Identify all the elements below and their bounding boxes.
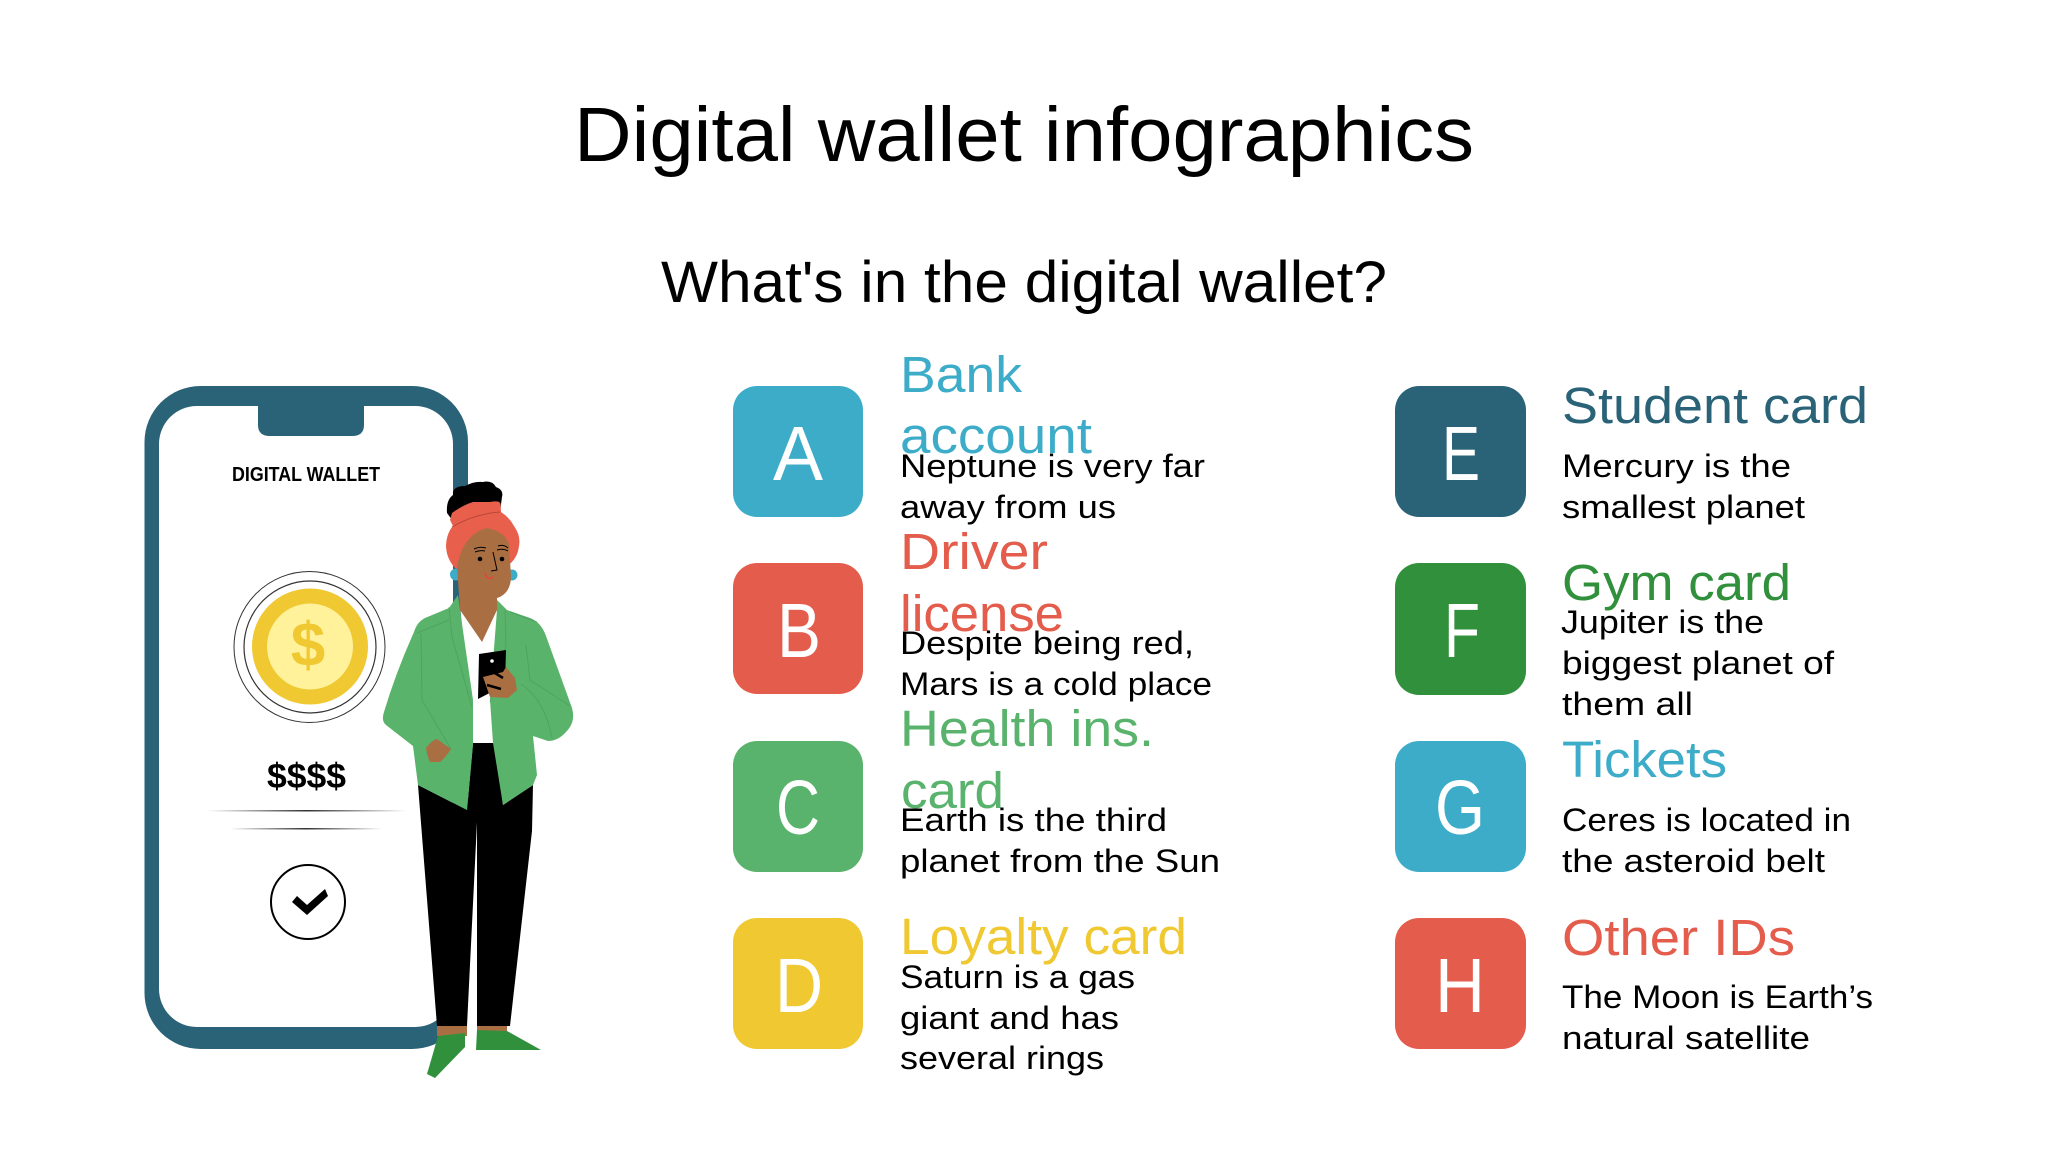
- body E: smallest planet: [1562, 489, 1805, 525]
- shoes: [427, 1030, 541, 1078]
- heading C: [900, 700, 1154, 819]
- item A: bank account: [733, 346, 1205, 525]
- badge E: [1395, 386, 1526, 517]
- item H: other IDs: [1395, 909, 1873, 1056]
- heading H: Other IDs: [1562, 909, 1795, 966]
- badge B: [733, 563, 863, 694]
- badge D: [733, 918, 863, 1049]
- item E: student card: [1395, 377, 1868, 525]
- body F: them all: [1562, 686, 1693, 722]
- heading E: Student card: [1562, 377, 1868, 434]
- badge H: [1395, 918, 1526, 1049]
- heading C: card: [901, 762, 1004, 819]
- badge D: D: [775, 943, 823, 1029]
- body B: Mars is a cold place: [900, 666, 1212, 702]
- icon: gold coin: [234, 572, 385, 722]
- amount: $$$$: [267, 757, 346, 796]
- shirt: [460, 605, 497, 743]
- heading F: Gym card: [1562, 554, 1791, 611]
- earrings: [450, 568, 518, 580]
- body D: [900, 959, 1135, 1076]
- icon: check mark: [271, 865, 345, 939]
- badge F: [1395, 563, 1526, 695]
- face details: [474, 545, 508, 578]
- body D: several rings: [900, 1040, 1104, 1076]
- heading A: Bank: [900, 346, 1023, 403]
- body B: Despite being red,: [900, 625, 1194, 661]
- item C: health insurance card: [733, 700, 1220, 879]
- badge A: A: [773, 411, 824, 497]
- turban: [446, 501, 519, 575]
- hand: [483, 667, 517, 698]
- body A: [900, 448, 1205, 525]
- badge H: H: [1435, 943, 1485, 1029]
- badge F: F: [1444, 588, 1480, 674]
- heading B: license: [900, 585, 1064, 642]
- body H: [1562, 979, 1873, 1056]
- badge C: C: [776, 765, 820, 851]
- item D: loyalty card: [733, 908, 1187, 1076]
- body H: natural satellite: [1562, 1020, 1810, 1056]
- body E: [1562, 448, 1805, 525]
- badge G: G: [1435, 765, 1485, 851]
- body F: Jupiter is the: [1561, 604, 1764, 640]
- illustration: phone and woman: [144, 386, 573, 1078]
- heading D: Loyalty card: [900, 908, 1187, 965]
- jacket: [383, 595, 573, 810]
- placeholder lines: [207, 810, 407, 830]
- body G: the asteroid belt: [1562, 843, 1825, 879]
- heading G: Tickets: [1562, 731, 1727, 788]
- icon: gold coin: $: [291, 611, 325, 680]
- title: Digital wallet infographics: [574, 92, 1474, 178]
- item G: tickets: [1395, 731, 1851, 879]
- heading C: Health ins.: [900, 700, 1154, 757]
- body G: Ceres is located in: [1562, 802, 1851, 838]
- body A: Neptune is very far: [900, 448, 1205, 484]
- body C: Earth is the third: [900, 802, 1167, 838]
- body C: [900, 802, 1220, 879]
- item F: gym card: [1395, 554, 1835, 722]
- phone label: DIGITAL WALLET: [232, 463, 380, 486]
- subtitle: What's in the digital wallet?: [661, 250, 1387, 315]
- body D: Saturn is a gas: [900, 959, 1135, 995]
- hair bun: [447, 482, 502, 524]
- body F: biggest planet of: [1562, 645, 1835, 681]
- body B: [900, 625, 1212, 702]
- heading B: Driver: [900, 523, 1048, 580]
- trousers: [418, 743, 533, 1026]
- body G: [1562, 802, 1851, 879]
- badge E: E: [1442, 411, 1480, 497]
- item B: driver license: [733, 523, 1212, 702]
- heading A: account: [900, 407, 1092, 464]
- hand in pocket: [426, 739, 451, 762]
- badge B: B: [777, 588, 821, 674]
- body A: away from us: [900, 489, 1116, 525]
- heading A: [900, 346, 1092, 464]
- badge G: [1395, 741, 1526, 872]
- badge C: [733, 741, 863, 872]
- heading B: [900, 523, 1064, 642]
- body E: Mercury is the: [1562, 448, 1791, 484]
- neck and face: [457, 528, 511, 642]
- woman holding phone: [383, 482, 573, 1078]
- body C: planet from the Sun: [900, 843, 1220, 879]
- badge A: [733, 386, 863, 517]
- body H: The Moon is Earth’s: [1562, 979, 1873, 1015]
- held phone: [478, 650, 506, 699]
- body F: [1561, 604, 1835, 722]
- body D: giant and has: [900, 1000, 1119, 1036]
- phone body: [144, 386, 468, 1049]
- ankles: [437, 1026, 507, 1036]
